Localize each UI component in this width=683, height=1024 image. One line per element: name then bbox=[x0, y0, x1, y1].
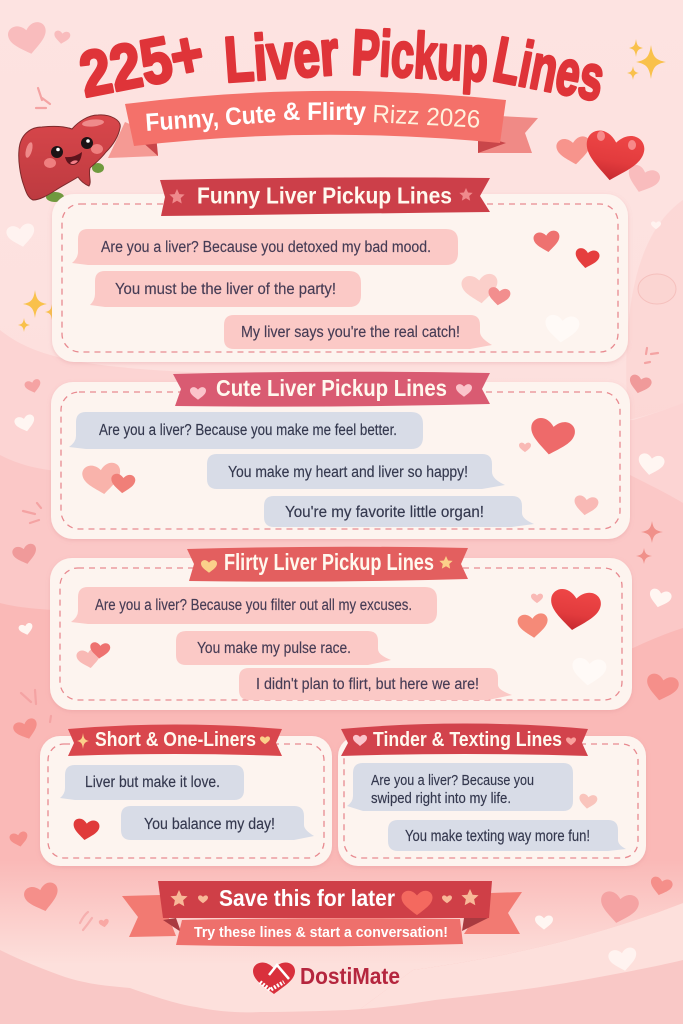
heading ribbon: cute: Cute Liver Pickup Lines bbox=[216, 375, 447, 401]
chat bubble: You make texting way more fun! bbox=[405, 828, 590, 845]
panel: tinder and texting lines bbox=[338, 724, 646, 866]
chat bubble: You balance my day! bbox=[144, 816, 275, 833]
chat bubble: My liver says you're the real catch! bbox=[241, 324, 460, 341]
title: Pickup bbox=[350, 16, 490, 95]
subtitle ribbon bbox=[108, 91, 538, 158]
heading ribbon: flirty bbox=[187, 547, 468, 582]
chat bubble: Are you a liver? Because you make me feel better. bbox=[99, 422, 397, 439]
chat bubble bbox=[60, 765, 244, 800]
sparkles: top right bbox=[627, 39, 666, 80]
chat bubble: You're my favorite little organ! bbox=[285, 504, 484, 521]
chat bubble: You make my heart and liver so happy! bbox=[228, 464, 468, 481]
icon: handshake heart bbox=[253, 962, 295, 994]
footer ribbon: save this for later bbox=[122, 881, 522, 946]
chat bubble: You make my pulse race. bbox=[197, 640, 351, 657]
chat bubble: Liver but make it love. bbox=[85, 774, 220, 791]
logo: DostiMate: DostiMate bbox=[300, 963, 400, 989]
title: Liver bbox=[222, 16, 341, 96]
chat bubble bbox=[176, 631, 391, 665]
icon: hearts bbox=[81, 416, 599, 517]
chat bubble bbox=[121, 806, 314, 840]
chat bubble bbox=[71, 587, 437, 624]
subtitle ribbon: & Flirty bbox=[283, 98, 366, 126]
heading ribbon: flirty: Flirty Liver Pickup Lines bbox=[224, 549, 434, 575]
chat bubble: Are you a liver? Because you filter out all my excuses. bbox=[95, 597, 412, 614]
chat bubble: Are you a liver? Because you bbox=[371, 773, 534, 789]
chat bubble: I didn't plan to flirt, but here we are! bbox=[256, 676, 479, 693]
chat bubble bbox=[90, 271, 361, 307]
panel: short and one-liners bbox=[40, 724, 332, 866]
chat bubble: Are you a liver? Because you detoxed my bad mood. bbox=[101, 239, 431, 256]
heading ribbon: short bbox=[68, 724, 282, 756]
chat bubble bbox=[347, 763, 573, 811]
logo: DostiMate bbox=[253, 962, 400, 994]
subtitle ribbon: Rizz 2026 bbox=[372, 100, 481, 134]
sparkles: left bbox=[18, 290, 59, 332]
heading ribbon: tinder bbox=[341, 724, 588, 756]
chat bubble bbox=[224, 315, 492, 349]
chat bubble bbox=[388, 820, 626, 851]
icon: hearts bbox=[461, 230, 600, 344]
heading ribbon: tinder: Tinder & Texting Lines bbox=[373, 729, 562, 751]
panel: funny liver pickup lines bbox=[52, 177, 628, 362]
chat bubble: You must be the liver of the party! bbox=[115, 281, 336, 298]
icon: decorative heart cluster top right bbox=[555, 128, 662, 197]
chat bubble bbox=[69, 412, 423, 449]
title: Lines bbox=[488, 23, 610, 115]
heading ribbon: funny: Funny Liver Pickup Lines bbox=[197, 182, 452, 208]
icon: hearts bbox=[76, 587, 607, 687]
subtitle ribbon: Funny, Cute bbox=[144, 100, 277, 137]
chat bubble bbox=[264, 496, 534, 527]
heading ribbon: cute bbox=[173, 372, 490, 407]
chat bubble bbox=[207, 454, 505, 489]
footer ribbon: save this for later: Try these lines & start a conversation! bbox=[194, 924, 448, 941]
icon: heart bbox=[578, 793, 598, 810]
chat bubble: swiped right into my life. bbox=[371, 791, 511, 807]
chat bubble bbox=[72, 229, 458, 265]
panel: cute liver pickup lines bbox=[51, 372, 630, 539]
title bbox=[74, 16, 610, 115]
panel: flirty liver pickup lines bbox=[50, 547, 632, 710]
footer ribbon: save this for later: Save this for later bbox=[219, 885, 395, 911]
heading ribbon: funny bbox=[160, 177, 490, 216]
icon: heart bbox=[72, 818, 100, 842]
heading ribbon: short: Short & One-Liners bbox=[95, 729, 256, 751]
title: 225+ bbox=[74, 16, 209, 111]
icon: liver mascot bbox=[19, 115, 120, 202]
chat bubble bbox=[239, 668, 512, 700]
